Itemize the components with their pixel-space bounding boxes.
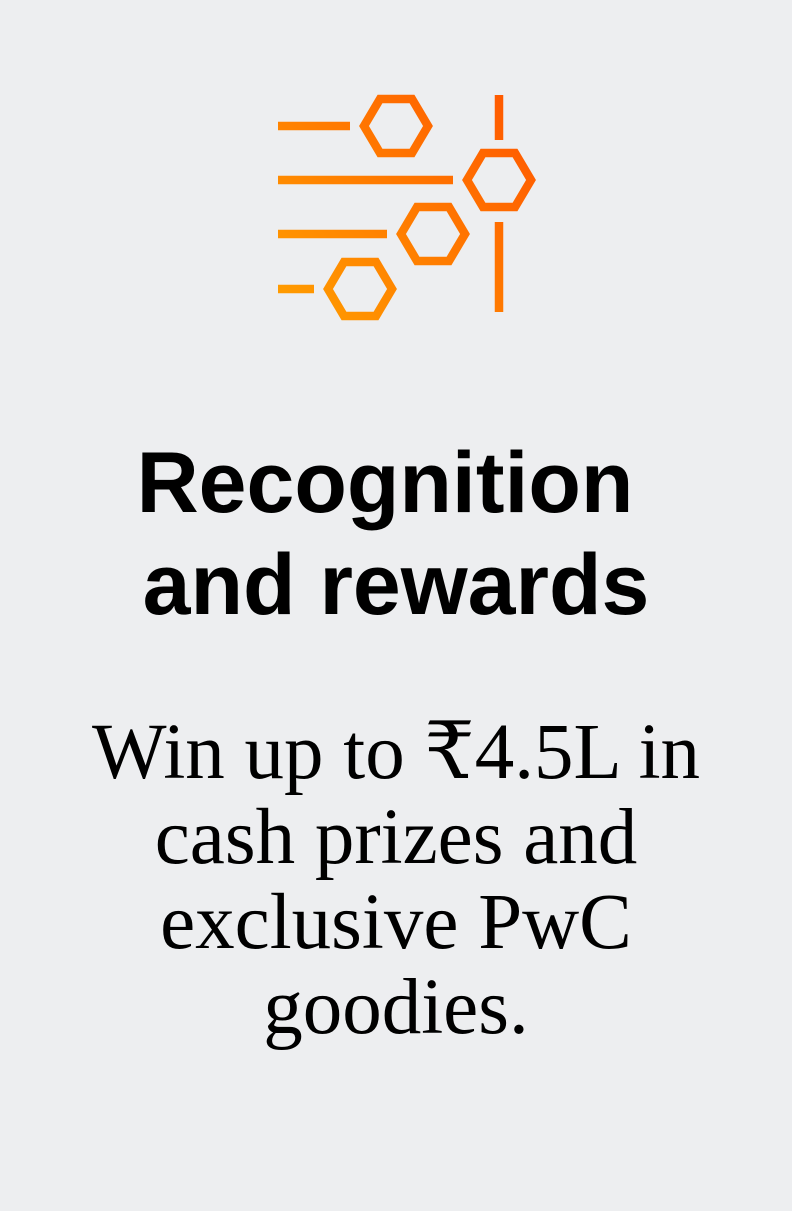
title: and rewards bbox=[143, 537, 649, 633]
text block: description: exclusive PwC bbox=[160, 879, 632, 966]
icon: sliders with hexagons bbox=[278, 94, 536, 320]
text block: description bbox=[92, 709, 700, 1051]
title bbox=[137, 435, 649, 633]
text block: description: goodies. bbox=[263, 964, 529, 1051]
text block: description: cash prizes and bbox=[155, 794, 637, 881]
text block: description: Win up to ₹4.5L in bbox=[92, 709, 700, 796]
title: Recognition bbox=[137, 435, 633, 531]
